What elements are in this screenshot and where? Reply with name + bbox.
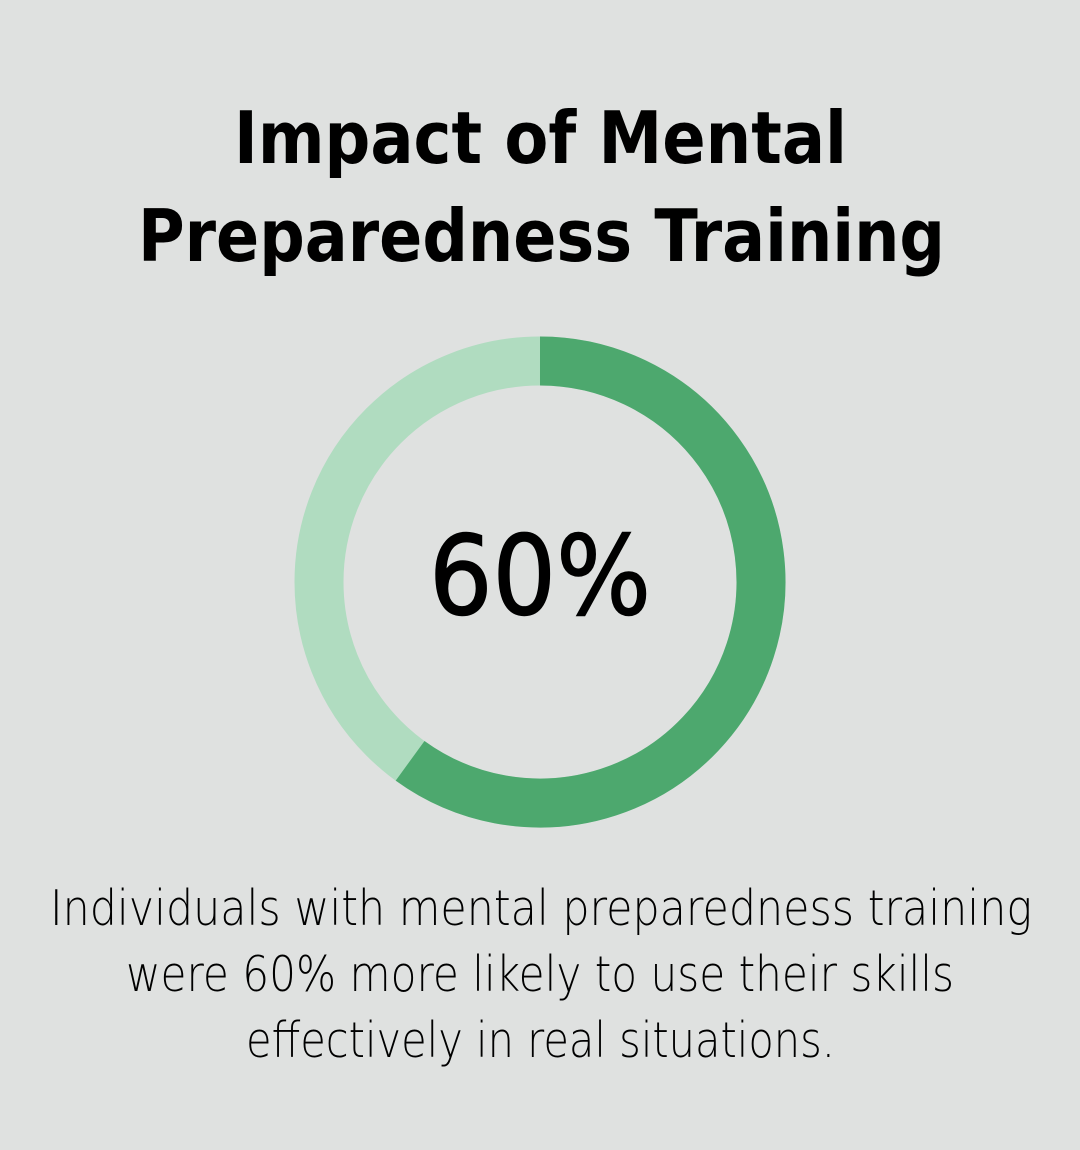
title: Impact of Mental bbox=[234, 96, 847, 180]
description: effectively in real situations. bbox=[246, 1012, 835, 1069]
title: Preparedness Training bbox=[138, 194, 945, 278]
description: were 60% more likely to use their skills bbox=[126, 946, 954, 1003]
center value: 60% bbox=[429, 512, 651, 640]
description bbox=[50, 880, 1032, 1069]
title bbox=[138, 96, 945, 278]
donut chart: 60% bbox=[319, 361, 761, 803]
